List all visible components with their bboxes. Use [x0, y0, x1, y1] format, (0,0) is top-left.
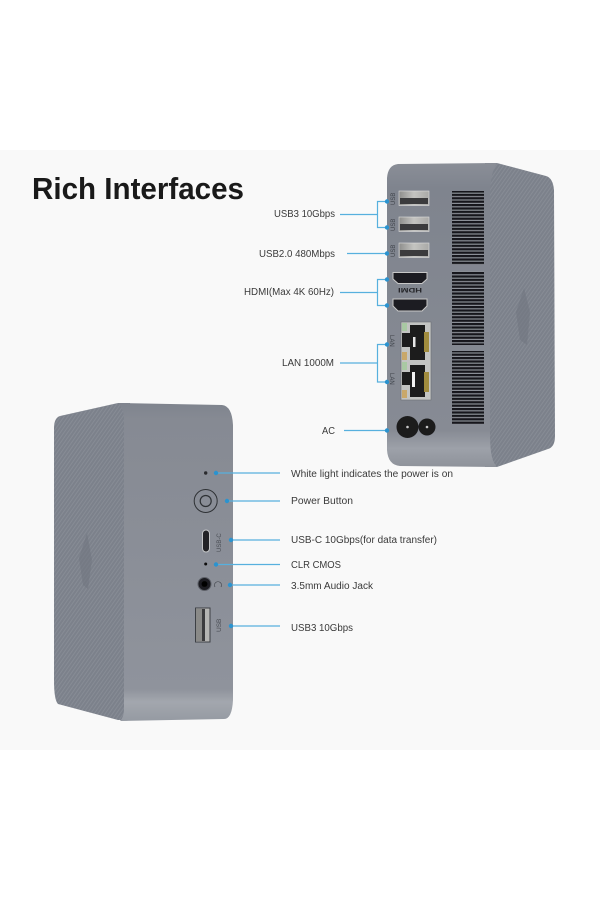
label: usb3 front: USB3 10Gbps	[291, 623, 353, 634]
callout line: led	[216, 472, 280, 474]
clr cmos pinhole	[204, 562, 207, 566]
callout line: ac	[344, 430, 387, 432]
headphone icon	[214, 582, 222, 587]
callout line: usb2	[347, 252, 387, 254]
hdmi label: HDMI	[397, 286, 422, 292]
usb labels: USB	[391, 245, 397, 257]
callout line: usb3 front	[231, 625, 280, 627]
label: lan: LAN 1000M	[282, 358, 334, 369]
usb-c label: USB-C	[217, 533, 223, 552]
device: rear view mini PC	[387, 163, 555, 467]
title: Rich Interfaces	[32, 171, 244, 206]
device side face	[54, 403, 130, 720]
device: front view mini PC	[54, 403, 233, 721]
usb port 2	[399, 217, 429, 232]
callout dots	[214, 199, 389, 628]
audio jack	[198, 578, 211, 590]
callout line: hdmi	[340, 280, 387, 306]
label: usb-c: USB-C 10Gbps(for data transfer)	[291, 535, 437, 546]
device side face	[485, 163, 555, 467]
lan labels	[388, 335, 394, 385]
label: usb3 rear: USB3 10Gbps	[274, 209, 335, 220]
usb-c port	[202, 530, 210, 552]
label: ac: AC	[322, 426, 335, 437]
background band	[0, 150, 600, 750]
callouts: rear	[216, 202, 387, 626]
label: led: White light indicates the power is on	[291, 469, 453, 480]
usb port	[196, 608, 210, 642]
device front face	[118, 403, 233, 721]
callout line: audio	[230, 584, 280, 586]
label: usb2: USB2.0 480Mbps	[259, 249, 335, 260]
callout line: usb3	[340, 202, 387, 228]
usb labels: USB	[391, 193, 397, 205]
hdmi port 1	[393, 272, 427, 284]
usb labels: USB	[391, 219, 397, 231]
ac socket	[396, 416, 436, 438]
lan labels: LAN	[388, 335, 394, 347]
callout line: usb-c	[231, 539, 280, 541]
usb label: USB	[216, 619, 223, 632]
lan block	[401, 322, 431, 400]
logo emboss on side	[516, 288, 530, 345]
usb port 1	[399, 191, 429, 206]
hdmi port 2	[393, 299, 427, 311]
callout line: clr	[216, 564, 280, 566]
lan labels: LAN	[388, 373, 394, 385]
rear vents	[452, 191, 484, 424]
label: audio: 3.5mm Audio Jack	[291, 581, 374, 592]
label: power: Power Button	[291, 496, 353, 507]
label: hdmi: HDMI(Max 4K 60Hz)	[244, 287, 334, 298]
logo emboss on side	[79, 533, 92, 589]
callout line: power	[227, 500, 280, 502]
led dot	[204, 471, 207, 475]
usb port 3	[399, 243, 429, 258]
label: clr: CLR CMOS	[291, 560, 341, 571]
device rear face	[387, 163, 497, 467]
power button	[194, 490, 217, 512]
usb labels	[391, 193, 397, 257]
callout line: lan	[340, 344, 387, 382]
